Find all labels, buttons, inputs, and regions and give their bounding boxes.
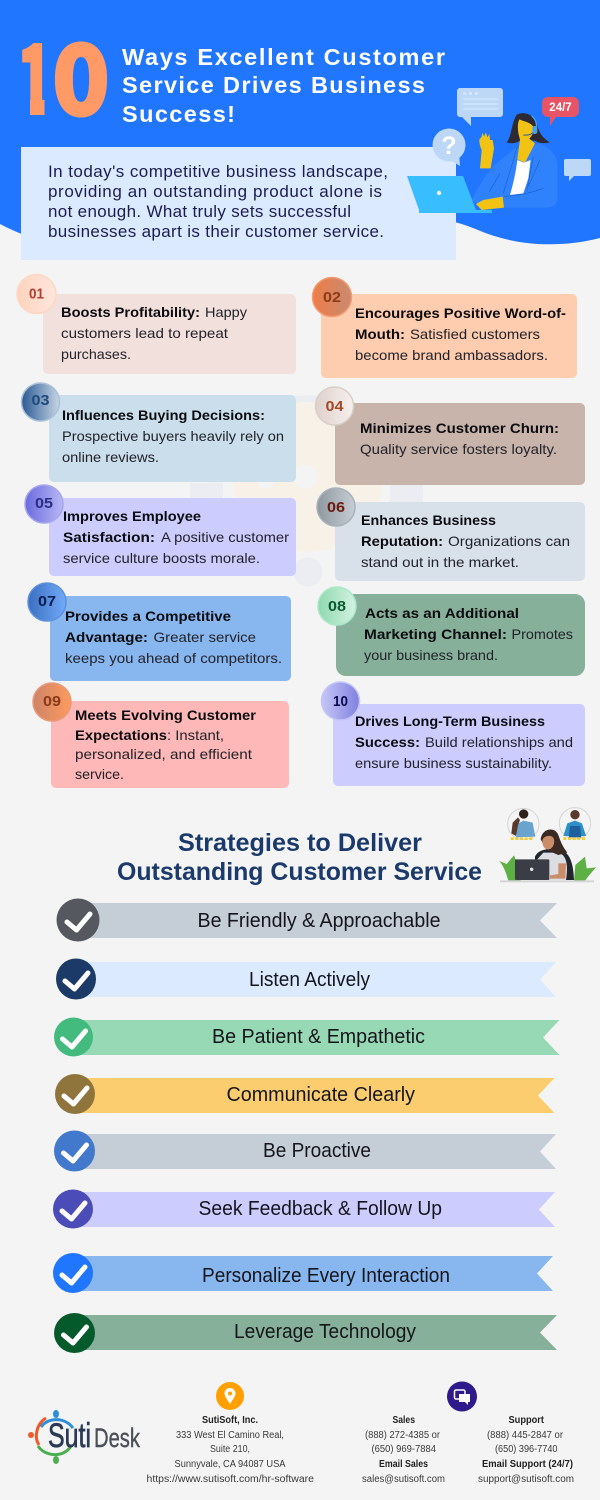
badge 02: 02 [323,290,341,306]
card 03: Prospective buyers heavily rely on [62,428,284,444]
card 01: customers lead to repeat [61,325,228,341]
support contact block: Email Support (24/7) [482,1459,573,1470]
card 06 [317,488,585,581]
card 08: your business brand. [364,647,498,663]
agent figure [472,113,557,210]
badge 09 [33,683,71,721]
ribbon: Be Friendly & Approachable [56,898,557,942]
icon: question bubble [432,128,466,166]
title: Service Drives Business [122,72,425,98]
sales contact block: Email Sales [379,1459,428,1470]
card 06: Organizations can [448,533,570,549]
card 08: Marketing Channel: [364,626,507,642]
card 02: become brand ambassadors. [355,347,548,363]
badge 01: 01 [29,286,44,302]
card 09: Expectations [75,727,167,743]
customer one [508,808,539,840]
support contact block: (888) 445-2847 or [487,1430,564,1441]
card 05: Satisfaction: [63,529,155,545]
badge 10 [322,682,360,720]
card 05: A positive customer [161,529,289,545]
sales contact block: sales@sutisoft.com [362,1474,445,1485]
ribbon: Personalize Every Interaction [53,1253,553,1293]
card 04 [316,387,585,485]
support contact block: Support [508,1415,545,1426]
address block: Sunnyvale, CA 94087 USA [174,1459,286,1470]
agent chair [535,849,574,880]
icon: message bubble [457,88,503,126]
SutiDesk logo: Suti [48,1417,91,1455]
card 07: Advantage: [65,629,148,645]
sales contact block [362,1415,445,1485]
title: Success! [122,101,235,127]
card 08: Acts as an Additional [365,605,519,621]
laptop [515,859,549,880]
card 01: Happy [205,304,247,320]
badge 05: 05 [35,496,53,512]
agent body [537,853,567,880]
card 10: Success: [355,734,420,750]
icon: chat [447,1382,477,1412]
card 10: Drives Long-Term Business [355,713,545,729]
ribbon: Be Proactive: Be Proactive [263,1140,371,1162]
strategies heading [117,829,482,886]
hero illustration: support agent [407,88,591,213]
intro panel: not enough. What truly sets successful [48,202,351,221]
icon: question bubble: ? [441,132,457,160]
address block: SutiSoft, Inc. [202,1415,258,1426]
ribbon: Be Friendly & Approachable: Be Friendly & Approachable [198,910,440,932]
title number 10 [22,42,108,118]
SutiDesk logo: Desk [94,1423,140,1453]
strategies heading: Strategies to Deliver [178,829,422,857]
card 01 [17,274,296,374]
sales contact block: (650) 969-7884 [372,1444,436,1455]
badge 08 [318,587,356,625]
card 03: Influences Buying Decisions: [62,407,265,423]
card 10: ensure business sustainability. [355,755,552,771]
title: Ways Excellent Customer [122,44,445,70]
card 09: : Instant, [167,727,224,743]
ribbon: Listen Actively [56,958,556,1000]
card 06: Enhances Business [361,512,496,528]
SutiDesk logo [28,1410,140,1464]
badge 07 [28,583,66,621]
card 05: service culture boosts morale. [63,550,260,566]
ribbon: Leverage Technology: Leverage Technology [234,1321,416,1343]
card 09: Meets Evolving Customer [75,707,257,723]
card 08 [318,587,585,676]
intro panel: In today's competitive business landscape, [48,162,388,181]
title number 10: 1 [17,2,53,144]
card 07: keeps you ahead of competitors. [65,650,282,666]
badge 08: 08 [328,599,346,615]
ribbon: Personalize Every Interaction: Personalize Every Interaction [202,1265,450,1287]
badge 04: 04 [326,399,344,415]
sales contact block: Sales [392,1415,415,1426]
card 05: Improves Employee [63,508,201,524]
ribbon: Be Patient & Empathetic [54,1018,560,1056]
card 06: stand out in the market. [361,554,519,570]
ribbon: Be Proactive [54,1130,556,1172]
card 02: Encourages Positive Word-of- [355,305,566,321]
address block: Suite 210, [210,1444,250,1455]
card 02 [312,278,577,378]
ribbon: Communicate Clearly [55,1074,554,1114]
icon: 24/7 bubble [542,97,579,126]
agent head [541,829,567,855]
card 10 [322,682,585,786]
ribbon: Seek Feedback & Follow Up: Seek Feedback & Follow Up [198,1198,442,1220]
ribbon: Communicate Clearly: Communicate Clearly [226,1084,415,1106]
badge 03 [22,383,60,421]
laptop [407,176,492,213]
icon: location pin [216,1382,244,1410]
table line [500,880,594,882]
badge 10: 10 [333,694,348,710]
card 07 [28,583,291,681]
header blue wave [0,0,600,255]
address block: 333 West El Camino Real, [176,1430,284,1441]
badge 01 [17,274,56,314]
address block: https://www.sutisoft.com/hr-software [146,1474,314,1485]
ribbon: Leverage Technology [54,1313,557,1353]
sales contact block: (888) 272-4385 or [365,1430,441,1441]
support contact block: support@sutisoft.com [478,1474,574,1485]
badge 06: 06 [327,500,345,516]
card 10: Build relationships and [425,734,573,750]
badge 04 [316,387,354,425]
address block [146,1415,314,1485]
background watermark logo [190,400,423,586]
card 07: Greater service [154,629,256,645]
ribbon: Seek Feedback & Follow Up [53,1190,555,1228]
card 02: Satisfied customers [410,326,540,342]
card 09 [33,683,289,788]
card 07: Provides a Competitive [65,608,231,624]
icon: 24/7 bubble: 24/7 [549,102,572,114]
intro panel: businesses apart is their customer service. [48,222,384,241]
card 09: service. [75,766,124,782]
card 06: Reputation: [361,533,443,549]
card 04: Minimizes Customer Churn: [360,420,559,436]
illustration: agent with rated customers [499,808,596,882]
card 04: Quality service fosters loyalty. [360,441,557,457]
leaves [499,855,521,881]
intro panel: providing an outstanding product alone is [48,182,382,201]
card 03 [22,383,296,482]
intro panel [21,147,456,260]
ribbon: Be Patient & Empathetic: Be Patient & Empathetic [212,1026,425,1048]
badge 07: 07 [38,594,56,610]
badge 06 [317,488,355,526]
card 02: Mouth: [355,326,405,342]
card 09: personalized, and efficient [75,746,252,762]
badge 03: 03 [32,393,50,409]
icon: small bubble [564,159,591,181]
strategies heading: Outstanding Customer Service [117,858,482,886]
badge 05 [25,485,63,523]
card 03: online reviews. [62,449,159,465]
badge 09: 09 [43,694,61,710]
title number 10: 0 [52,2,110,144]
card 08: Promotes [512,626,573,642]
support contact block: (650) 396-7740 [495,1444,558,1455]
card 01: Boosts Profitability: [61,304,200,320]
badge 02 [312,278,352,316]
title [122,44,445,127]
customer two [559,808,591,839]
card 01: purchases. [61,346,131,362]
card 05 [25,485,296,576]
ribbon: Listen Actively: Listen Actively [249,969,370,991]
support contact block [478,1415,574,1485]
